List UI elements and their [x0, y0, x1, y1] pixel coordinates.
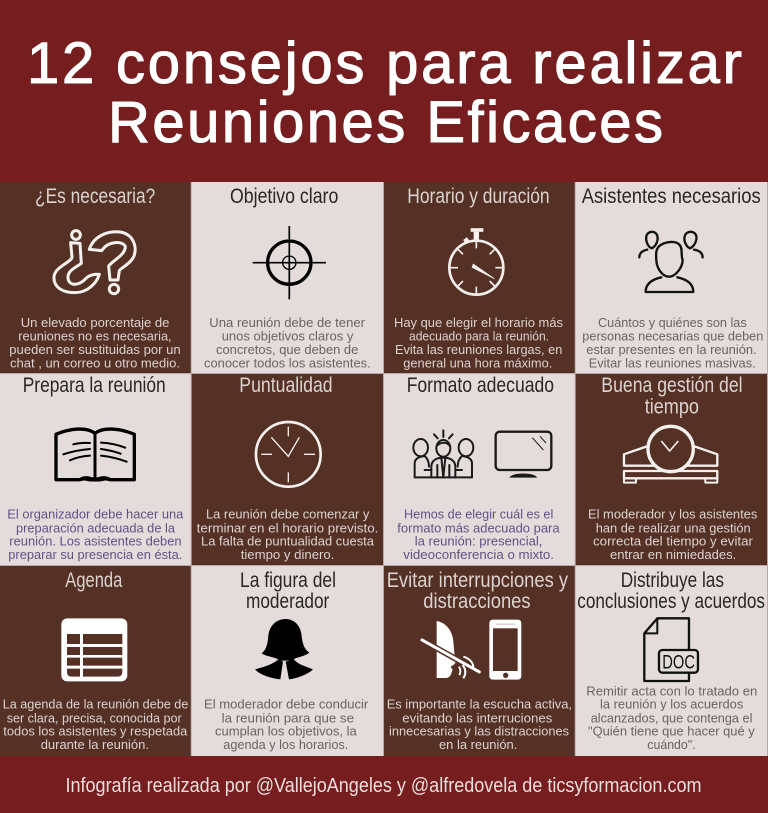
text block: El organizador debe hacer una [7, 507, 184, 522]
text block [394, 315, 563, 370]
text block: han de realizar una gestión [596, 520, 751, 535]
text block [7, 507, 184, 562]
text block [588, 507, 758, 562]
text block [3, 697, 188, 752]
text block: estar presentes en la reunión. [586, 342, 757, 357]
panel: Evitar interrupciones y distracciones [384, 566, 575, 756]
text block: terminar en el horario previsto. [197, 520, 378, 535]
text block: preparar su presencia en ésta. [8, 547, 182, 562]
heading: Formato adecuado: Formato adecuado [407, 373, 554, 397]
icon: moderator silhouette [255, 619, 313, 679]
text block: correcta del tiempo y evitar [593, 534, 754, 549]
panel: Objetivo claro [192, 182, 383, 373]
text block: Es importante la escucha activa, [387, 697, 572, 712]
text block: alcanzados, que contenga el [591, 710, 752, 725]
text block: innecesarias y las distracciones [389, 724, 569, 739]
text block: El moderador y los asistentes [588, 507, 758, 522]
heading: Evitar interrupciones y distracciones: Evitar interrupciones y [387, 568, 568, 592]
heading: Evitar interrupciones y distracciones [387, 568, 568, 613]
icon: table [61, 618, 127, 681]
icon: DOC file [644, 618, 698, 681]
icon: open book [56, 429, 134, 481]
text block: la reunión y los acuerdos [600, 697, 744, 712]
icon: target [253, 226, 326, 299]
icon: stopwatch [449, 230, 503, 295]
title [27, 31, 742, 155]
text block: pueden ser sustituidas por un [9, 342, 181, 357]
text block [204, 315, 371, 370]
text block: todos los asistentes y respetada [3, 724, 188, 739]
text block: adecuado para la reunión. [409, 328, 549, 343]
icon: people [639, 232, 703, 292]
icon: meeting people [413, 430, 473, 477]
text block [582, 315, 763, 370]
text block: La falta de puntualidad cuesta [201, 534, 375, 549]
text block: La agenda de la reunión debe de [3, 697, 188, 712]
text block: unos objetivos claros y [222, 328, 354, 343]
text block: en la reunión. [439, 737, 517, 752]
heading: La figura del moderador: La figura del [240, 568, 336, 592]
panel: Formato adecuado [384, 373, 575, 565]
panel: Puntualidad [192, 373, 383, 565]
icon: clock [256, 422, 321, 487]
heading: Puntualidad: Puntualidad [239, 373, 333, 397]
text block: ser clara, precisa, conocida por [7, 710, 182, 725]
heading: La figura del moderador: moderador [246, 589, 329, 613]
heading: Evitar interrupciones y distracciones: distracciones [423, 589, 531, 613]
text block: Hemos de elegir cuál es el [404, 507, 553, 522]
text block: concretos, que deben de [216, 342, 358, 357]
icon: mantel clock [624, 426, 717, 483]
text block: "Quién tiene que hacer qué y [588, 724, 755, 739]
icon: question marks [54, 231, 135, 294]
text block: general una hora máximo. [403, 355, 552, 370]
text block: conocer todos los asistentes. [204, 355, 371, 370]
heading: Buena gestión del tiempo [601, 373, 743, 419]
panel: Buena gestión del tiempo [576, 373, 767, 565]
text block [397, 507, 560, 562]
icon: DOC file: DOC [662, 653, 695, 674]
text block [9, 315, 181, 370]
text block: personas necesarias que deben [582, 328, 763, 343]
text block [586, 683, 757, 752]
text block: Un elevado porcentaje de [21, 315, 169, 330]
text block: La reunión debe comenzar y [206, 507, 370, 522]
panel: Distribuye las conclusiones y acuerdos [576, 566, 767, 756]
text block: evitando las interruciones [402, 710, 553, 725]
text block: videoconferencia o mixto. [403, 547, 554, 562]
text block: Hay que elegir el horario más [394, 315, 563, 330]
text block [197, 507, 378, 562]
text block: formato más adecuado para [397, 520, 560, 535]
heading: Distribuye las conclusiones y acuerdos: Distribuye las [621, 568, 724, 592]
footer credit: Infografía realizada por @VallejoAngeles y @alfredovela de ticsyformacion.com [66, 775, 702, 797]
text block: El moderador debe conducir [204, 697, 369, 712]
text block [204, 697, 369, 752]
text block [387, 697, 572, 752]
text block: Una reunión debe de tener [209, 315, 366, 330]
text block: tiempo y dinero. [241, 547, 334, 562]
heading: Agenda: Agenda [65, 568, 122, 592]
text block: preparación adecuada de la [16, 520, 176, 535]
heading: Prepara la reunión: Prepara la reunión [23, 373, 166, 397]
text block: reuniones no es necesaria, [18, 328, 172, 343]
heading: Buena gestión del tiempo: tiempo [645, 395, 699, 419]
panel: Horario y duración [384, 182, 575, 373]
icon: smartphone [489, 620, 521, 680]
text block: agenda y los horarios. [223, 737, 348, 752]
text block: Remitir acta con lo tratado en [586, 683, 757, 698]
text block: chat , un correo u otro medio. [10, 355, 180, 370]
title: 12 consejos para realizar [27, 31, 742, 96]
text block: cumplan los objetivos, la [215, 724, 357, 739]
panel: Prepara la reunión [0, 373, 191, 565]
icon: silenced speaker [422, 621, 479, 678]
heading: Distribuye las conclusiones y acuerdos [577, 568, 765, 613]
heading: ¿Es necesaria?: ¿Es necesaria? [35, 184, 155, 208]
icon: monitor [496, 432, 551, 477]
text block: entrar en nimiedades. [610, 547, 736, 562]
text block: Evitar las reuniones masivas. [589, 355, 756, 370]
text block: cuándo". [647, 737, 696, 752]
heading: Objetivo claro: Objetivo claro [230, 184, 338, 208]
text block: la reunión para que se [222, 710, 354, 725]
title: Reuniones Eficaces [108, 90, 663, 155]
panel: ¿Es necesaria? [0, 182, 191, 373]
panel: Agenda [0, 566, 191, 756]
text block: Cuántos y quiénes son las [598, 315, 747, 330]
text block: reunión. Los asistentes deben [9, 534, 182, 549]
text block: la reunión: presencial, [415, 534, 542, 549]
heading: La figura del moderador [240, 568, 336, 613]
heading: Horario y duración: Horario y duración [407, 184, 550, 208]
text block: durante la reunión. [41, 737, 149, 752]
panel: Asistentes necesarios [576, 182, 767, 373]
text block: Evita las reuniones largas, en [395, 342, 562, 357]
panel: La figura del moderador [192, 566, 383, 756]
